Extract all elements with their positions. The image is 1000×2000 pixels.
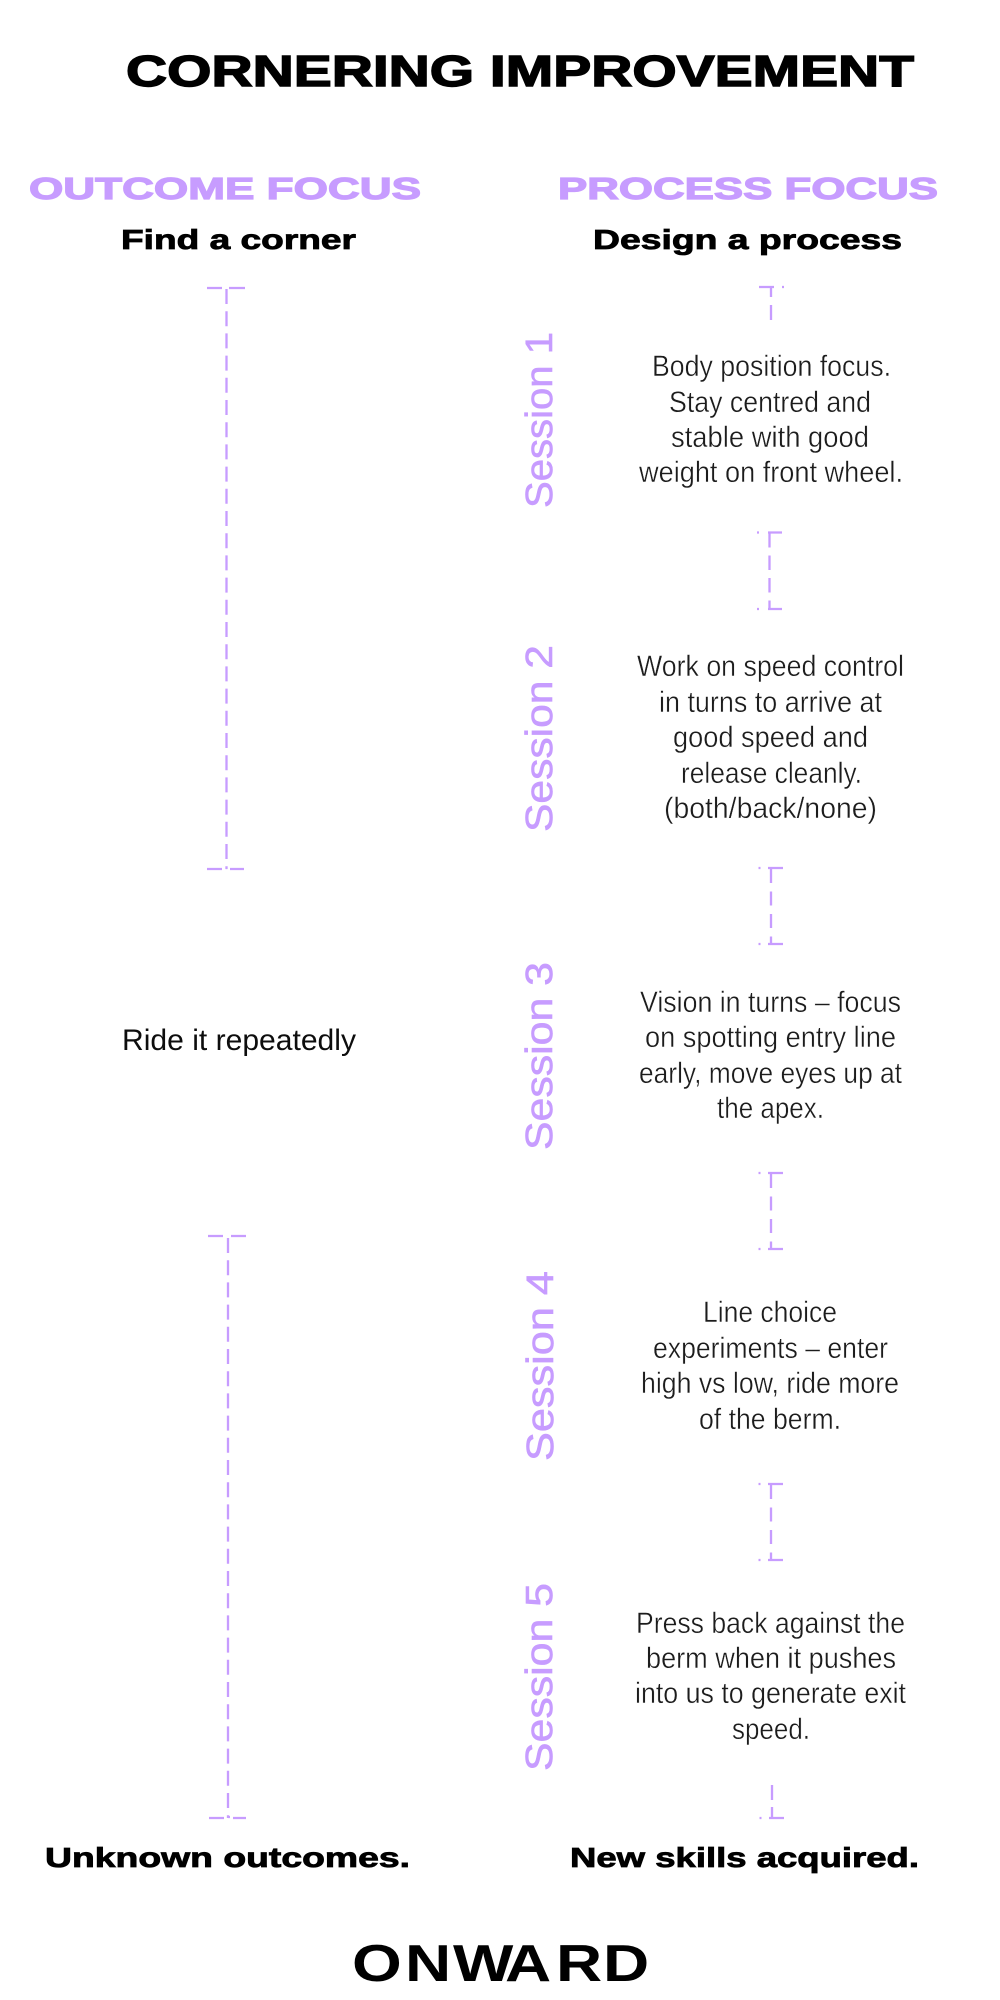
heading: outcome focus: OUTCOME FOCUS <box>29 171 421 206</box>
arrow: connector session 3 to 4 <box>758 1173 783 1249</box>
session 2 label: Session 2 <box>519 645 561 832</box>
panel: process focus column <box>519 287 919 1873</box>
arrow: connector session 2 to 3 <box>758 868 783 945</box>
arrow: connector session 1 to 2 <box>757 532 782 609</box>
arrow: connector out of session 5 <box>760 1785 784 1818</box>
session 4 description: of the berm. <box>699 1403 841 1436</box>
session 1 description: weight on front wheel. <box>638 456 903 489</box>
session 4 description: Line choice <box>703 1296 837 1329</box>
session 5 description: Press back against the <box>636 1607 905 1640</box>
session 1 description <box>638 350 903 489</box>
panel: outcome focus column <box>45 288 410 1873</box>
session 3 description: the apex. <box>717 1092 824 1125</box>
session 5 description: speed. <box>732 1713 810 1746</box>
arrow: connector session 4 to 5 <box>758 1484 783 1560</box>
title: CORNERING IMPROVEMENT <box>126 47 914 96</box>
logo: onward: ONWARD <box>352 1935 649 1993</box>
session 3 description: on spotting entry line <box>645 1021 896 1054</box>
subheading: find a corner: Find a corner <box>121 224 356 255</box>
session 5 label: Session 5 <box>519 1583 561 1771</box>
session 2 description: good speed and <box>673 721 868 754</box>
session 2 description: in turns to arrive at <box>659 686 883 719</box>
arrow: left lower dashed bracket <box>208 1236 246 1818</box>
session 1 description: stable with good <box>671 421 869 454</box>
session 5 description: berm when it pushes <box>646 1642 896 1675</box>
session 1 description: Stay centred and <box>669 386 871 419</box>
subheading: design a process: Design a process <box>593 224 902 255</box>
text: ride it repeatedly: Ride it repeatedly <box>122 1024 356 1057</box>
session 2 description: Work on speed control <box>637 650 904 683</box>
conclusion: new skills acquired: New skills acquired. <box>570 1842 919 1873</box>
session 2 description <box>637 650 904 825</box>
session 3 description: early, move eyes up at <box>639 1057 903 1090</box>
session 5 description <box>635 1607 907 1746</box>
arrow: connector into session 1 <box>759 287 784 320</box>
session 3 description <box>639 986 903 1125</box>
conclusion: unknown outcomes: Unknown outcomes. <box>45 1842 410 1873</box>
heading: process focus: PROCESS FOCUS <box>558 171 938 206</box>
session 2 description: (both/back/none) <box>664 792 877 825</box>
session 3 description: Vision in turns – focus <box>640 986 901 1019</box>
session 4 description: experiments – enter <box>653 1332 888 1365</box>
session 4 description <box>641 1296 899 1436</box>
session 1 description: Body position focus. <box>652 350 891 383</box>
session 4 description: high vs low, ride more <box>641 1367 899 1400</box>
session 1 label: Session 1 <box>519 332 561 508</box>
session 3 label: Session 3 <box>519 962 561 1150</box>
session 2 description: release cleanly. <box>681 757 862 790</box>
arrow: left upper dashed bracket <box>207 288 245 869</box>
session 5 description: into us to generate exit <box>635 1677 907 1710</box>
session 4 label: Session 4 <box>520 1271 562 1461</box>
